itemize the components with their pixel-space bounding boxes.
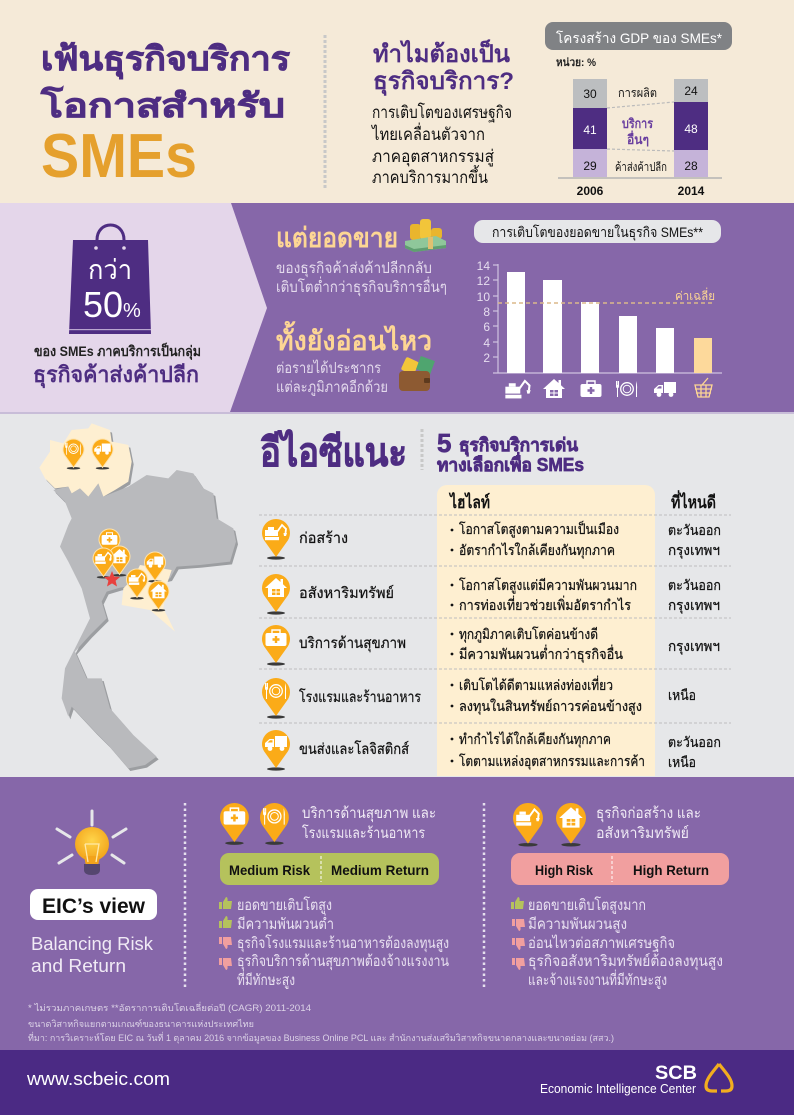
heading: EIC recommends: อีไอซีแนะ xyxy=(260,429,407,475)
y axis labels: 12 xyxy=(477,274,490,288)
panel heading xyxy=(596,805,701,842)
pros and cons list: และจ้างแรงงานที่มีทักษะสูง xyxy=(528,969,667,989)
bar 2014: 48 xyxy=(684,122,698,136)
highlight column panel xyxy=(437,485,655,776)
risk pill xyxy=(220,853,439,885)
text block: why services: ภาคบริการมากขึ้น xyxy=(372,165,488,187)
icon: wallet xyxy=(399,356,435,391)
map of Thailand xyxy=(39,423,238,771)
top band background xyxy=(0,0,794,203)
text block: why services xyxy=(370,39,514,187)
map pins central xyxy=(93,529,130,578)
text: Balancing Risk and Return xyxy=(31,934,154,976)
y axis labels xyxy=(477,259,490,365)
row: logistics xyxy=(262,730,721,771)
risk pill xyxy=(511,853,729,885)
title: SMEs xyxy=(41,122,197,191)
text block: retail share: ของ SMEs ภาคบริการเป็นกลุ่ม xyxy=(34,342,201,360)
panel heading: โรงแรมและร้านอาหาร xyxy=(302,824,425,842)
row: health xyxy=(262,625,720,666)
row: logistics: โตตามแหล่งอุตสาหกรรมและการค้า xyxy=(459,753,645,770)
icon: Bangkok star xyxy=(104,571,120,586)
heading: EIC recommends xyxy=(260,428,584,475)
map pins north xyxy=(63,439,113,469)
bar 2014: 28 xyxy=(684,159,698,173)
footnotes: * ไม่รวมภาคเกษตร **อัตราการเติบโตเฉลี่ยต่อปี (CAGR) 2011-2014 xyxy=(28,1001,311,1013)
EIC's view pill xyxy=(30,889,157,920)
row: hotels and restaurants xyxy=(262,676,696,719)
segment labels xyxy=(615,86,667,174)
text block: sensitivity xyxy=(276,320,432,396)
panel heading: ธุรกิจก่อสร้าง และ xyxy=(596,805,701,823)
bar 2014: 24 xyxy=(684,84,698,98)
text block: sales: ของธุรกิจค้าส่งค้าปลีกกลับ xyxy=(276,260,432,278)
chart heading pill xyxy=(474,220,721,243)
band 3 background xyxy=(0,414,794,777)
row: real estate xyxy=(262,574,721,615)
y axis labels: 8 xyxy=(483,305,490,319)
row: logistics: ตะวันออก xyxy=(668,734,721,750)
heading: EIC recommends: ธุรกิจบริการเด่น xyxy=(459,435,579,457)
row: construction: ก่อสร้าง xyxy=(299,530,348,547)
y axis labels: 2 xyxy=(483,351,490,365)
table headers xyxy=(448,490,716,512)
icon: money and coins xyxy=(405,219,446,252)
bar 2006 xyxy=(573,79,607,177)
row: logistics: ขนส่งและโลจิสติกส์ xyxy=(299,740,409,758)
y axis labels: 10 xyxy=(477,290,490,304)
table headers: ไฮไลท์ xyxy=(448,492,490,512)
table: 5 services xyxy=(259,485,731,776)
text block: why services: ไทยเคลื่อนตัวจาก xyxy=(370,122,485,144)
row: logistics: ทำกำไรได้ใกล้เคียงกันทุกภาค xyxy=(459,731,611,748)
row: real estate: การท่องเที่ยวช่วยเพิ่มอัตรากำไร xyxy=(459,596,631,613)
icon: shopping bag 50%: กว่า xyxy=(88,255,132,285)
row: health: บริการด้านสุขภาพ xyxy=(299,635,406,653)
panel heading xyxy=(302,805,436,842)
axes xyxy=(493,264,722,373)
pros and cons list: ธุรกิจบริการด้านสุขภาพต้องจ้างแรงงาน xyxy=(237,953,449,971)
segment labels: บริการ xyxy=(622,116,653,131)
segment labels: การผลิต xyxy=(618,86,657,100)
chart heading pill: การเติบโตของยอดขายในธุรกิจ SMEs** xyxy=(492,224,703,241)
pros and cons list xyxy=(511,896,723,989)
row: hotels and restaurants: ลงทุนในสินทรัพย์ถาวรค่อนข้างสูง xyxy=(459,698,642,715)
text block: sales: เติบโตต่ำกว่าธุรกิจบริการอื่นๆ xyxy=(276,276,447,297)
chart: sales growth xyxy=(474,220,722,398)
chart heading pill: โครงสร้าง GDP ของ SMEs* xyxy=(556,30,723,46)
average line: ค่าเฉลี่ย xyxy=(675,287,715,303)
SCB wordmark xyxy=(540,1063,697,1096)
icon: shopping bag 50%: 50% xyxy=(83,284,141,325)
title: เฟ้นธุรกิจบริการ xyxy=(41,40,290,80)
year labels: 2014 xyxy=(678,184,705,198)
year labels: 2006 xyxy=(577,184,604,198)
y axis labels: 14 xyxy=(477,259,490,273)
panel: high risk xyxy=(511,803,729,989)
map pins east xyxy=(126,552,169,611)
chart heading pill xyxy=(545,22,732,50)
row: construction: กรุงเทพฯ xyxy=(668,542,720,559)
segment labels: อื่นๆ xyxy=(627,130,649,147)
risk pill: High Return xyxy=(633,862,709,878)
row: construction: อัตรากำไรใกล้เคียงกันทุกภาค xyxy=(459,542,615,559)
icons: categories xyxy=(505,379,676,398)
pros and cons list xyxy=(219,896,449,989)
row: construction xyxy=(262,519,721,560)
row: hotels and restaurants: เหนือ xyxy=(668,687,696,703)
text block: sales xyxy=(276,223,447,297)
row: health: ทุกภูมิภาคเติบโตค่อนข้างดี xyxy=(459,626,598,643)
website: www.scbeic.com xyxy=(26,1069,170,1089)
bars xyxy=(507,272,712,373)
text block: why services: ทำไมต้องเป็น xyxy=(373,39,511,68)
text block: retail share: ธุรกิจค้าส่งค้าปลีก xyxy=(33,362,199,389)
icon: SCB logo xyxy=(706,1064,732,1091)
y axis labels: 4 xyxy=(483,336,490,350)
icon: light bulb xyxy=(57,811,126,875)
band 4 background xyxy=(0,777,794,1050)
icon: basket xyxy=(695,378,712,397)
pros and cons list: อ่อนไหวต่อสภาพเศรษฐกิจ xyxy=(528,934,675,952)
table headers: ที่ไหนดี xyxy=(671,490,716,512)
bar 2006: 29 xyxy=(583,159,597,173)
pins xyxy=(513,803,586,846)
title xyxy=(40,40,290,191)
text: Balancing Risk and Return: and Return xyxy=(31,956,126,976)
footnotes: ขนาดวิสาหกิจแยกตามเกณฑ์ของธนาคารแห่งประเทศไทย xyxy=(28,1018,254,1029)
heading: EIC recommends: ทางเลือกเพื่อ SMEs xyxy=(437,452,584,475)
chart: GDP structure xyxy=(545,22,732,198)
pros and cons list: ธุรกิจอสังหาริมทรัพย์ต้องลงทุนสูง xyxy=(528,953,723,971)
title: โอกาสสำหรับ xyxy=(40,86,285,124)
pros and cons list: ธุรกิจโรงแรมและร้านอาหารต้องลงทุนสูง xyxy=(237,934,449,953)
pros and cons list: ที่มีทักษะสูง xyxy=(237,969,295,989)
text block: sensitivity: แต่ละภูมิภาคอีกด้วย xyxy=(276,379,388,396)
icon: shopping bag 50% xyxy=(69,225,151,334)
unit label: หน่วย: % xyxy=(556,57,596,69)
bar 2006: 41 xyxy=(583,123,597,137)
EIC's view pill: EIC’s view xyxy=(42,895,146,918)
SCB wordmark: Economic Intelligence Center xyxy=(540,1081,697,1096)
text block: why services: ภาคอุตสาหกรรมสู่ xyxy=(372,147,495,167)
pros and cons list: ยอดขายเติบโตสูงมาก xyxy=(528,896,646,914)
bar 2014 xyxy=(674,79,708,177)
text block: why services: ธุรกิจบริการ? xyxy=(373,68,514,97)
pins xyxy=(220,803,289,845)
risk pill: High Risk xyxy=(535,862,593,878)
row: construction: ตะวันออก xyxy=(668,522,721,538)
text block: sales: แต่ยอดขาย xyxy=(276,223,398,253)
y axis labels: 6 xyxy=(483,320,490,334)
row: real estate: กรุงเทพฯ xyxy=(668,597,720,614)
SCB wordmark: SCB xyxy=(655,1063,697,1084)
row: logistics: เหนือ xyxy=(668,754,696,770)
row: construction: โอกาสโตสูงตามความเป็นเมือง xyxy=(459,520,619,538)
text block: why services: การเติบโตของเศรษฐกิจ xyxy=(372,102,512,123)
footer bar xyxy=(0,1050,794,1115)
year labels xyxy=(577,184,705,198)
risk pill: Medium Return xyxy=(331,862,429,878)
panel: medium risk xyxy=(219,803,449,989)
row: real estate: โอกาสโตสูงแต่มีความพันผวนมาก xyxy=(459,577,637,594)
row: hotels and restaurants: โรงแรมและร้านอาหาร xyxy=(299,688,421,706)
pros and cons list: ยอดขายเติบโตสูง xyxy=(237,896,332,914)
segment labels: ค้าส่งค้าปลีก xyxy=(615,160,667,174)
row: real estate: อสังหาริมทรัพย์ xyxy=(299,585,394,602)
pros and cons list: มีความพันผวนต่ำ xyxy=(237,913,334,933)
risk pill: Medium Risk xyxy=(229,862,310,878)
row: hotels and restaurants: เติบโตได้ดีตามแหล่งท่องเที่ยว xyxy=(459,676,613,693)
row: health: มีความพันผวนต่ำกว่าธุรกิจอื่น xyxy=(459,645,623,663)
band 2 backgrounds xyxy=(0,203,794,414)
footnotes: ที่มา: การวิเคราะห์โดย EIC ณ วันที่ 1 ตุลาคม 2016 จากข้อมูลของ Business Online PCL และ สำนักงานส่งเสริมวิสาหกิจขนาดกลางและขนาดย่อม (สสว.) xyxy=(28,1031,614,1044)
heading: EIC recommends: 5 xyxy=(437,428,451,458)
panel heading: อสังหาริมทรัพย์ xyxy=(596,825,689,842)
text: Balancing Risk and Return: Balancing Risk xyxy=(31,934,154,954)
footnotes xyxy=(28,1001,614,1044)
bar 2006: 30 xyxy=(583,87,597,101)
pros and cons list: มีความพันผวนสูง xyxy=(528,916,627,933)
text block: sensitivity: ต่อรายได้ประชากร xyxy=(276,359,381,377)
text block: sensitivity: ทั้งยังอ่อนไหว xyxy=(276,320,432,356)
row: real estate: ตะวันออก xyxy=(668,577,721,593)
text block: retail share xyxy=(33,342,201,389)
panel heading: บริการด้านสุขภาพ และ xyxy=(302,805,436,823)
row: health: กรุงเทพฯ xyxy=(668,638,720,655)
